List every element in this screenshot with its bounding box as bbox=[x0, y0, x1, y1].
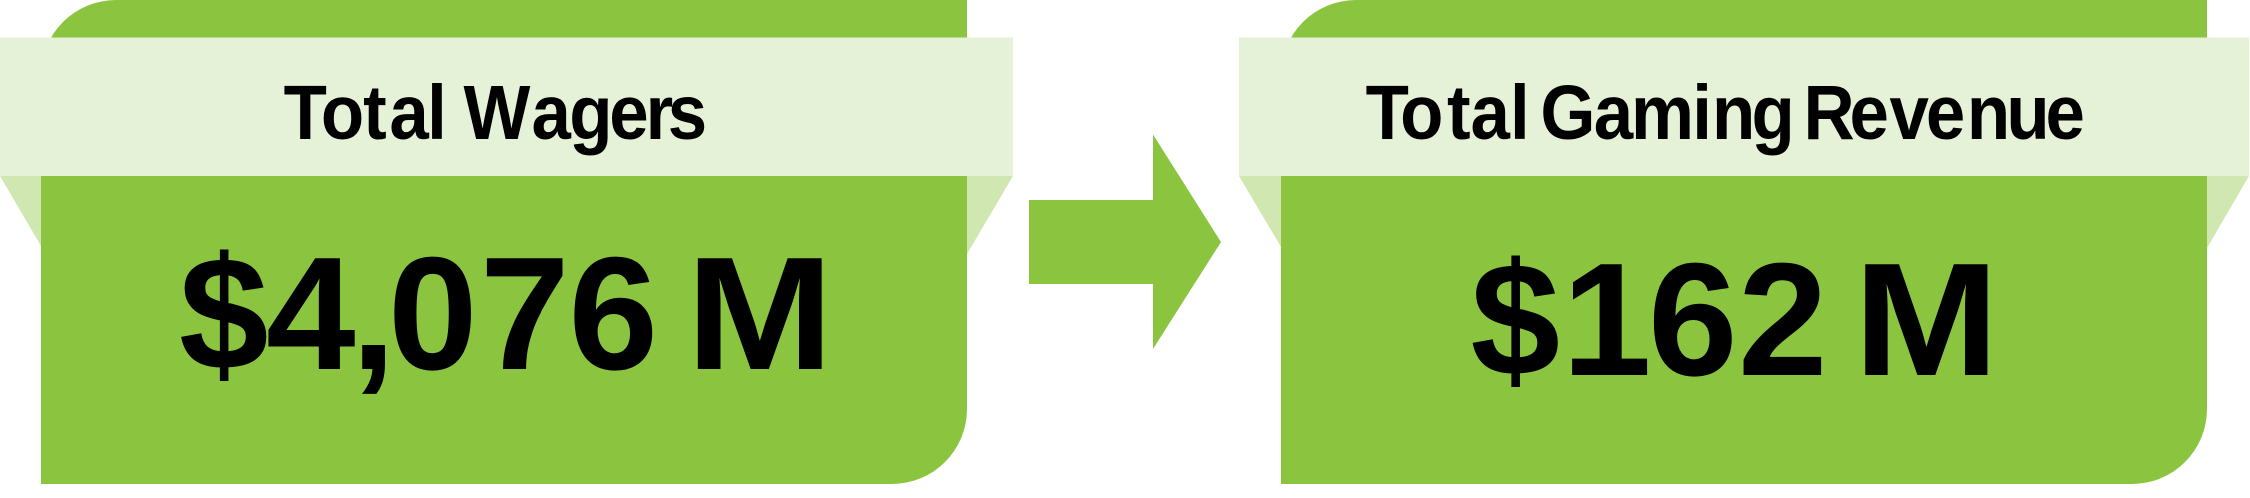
ribbon fold: right bbox=[2207, 176, 2249, 248]
card background bbox=[1281, 0, 2207, 484]
arrow bbox=[1029, 134, 1221, 349]
card background bbox=[41, 0, 967, 484]
heading band bbox=[1239, 38, 2249, 176]
heading: total wagers: Total Wagers bbox=[284, 69, 707, 156]
ribbon fold: right bbox=[967, 176, 1013, 254]
ribbon fold: left bbox=[1239, 176, 1281, 247]
heading: total gaming revenue: Total Gaming Revenue bbox=[1366, 69, 2085, 156]
value: $4,076 M: $4,076 bbox=[179, 224, 658, 404]
value: $4,076 M: M bbox=[686, 224, 834, 404]
heading band bbox=[0, 38, 1013, 176]
ribbon fold: left bbox=[0, 176, 41, 246]
value: $162 M: $162 bbox=[1470, 230, 1828, 410]
value: $162 M bbox=[1470, 230, 1999, 410]
value: $162 M: M bbox=[1854, 230, 1999, 410]
panel: total gaming revenue bbox=[1239, 0, 2249, 484]
panel: total wagers bbox=[0, 0, 1013, 484]
